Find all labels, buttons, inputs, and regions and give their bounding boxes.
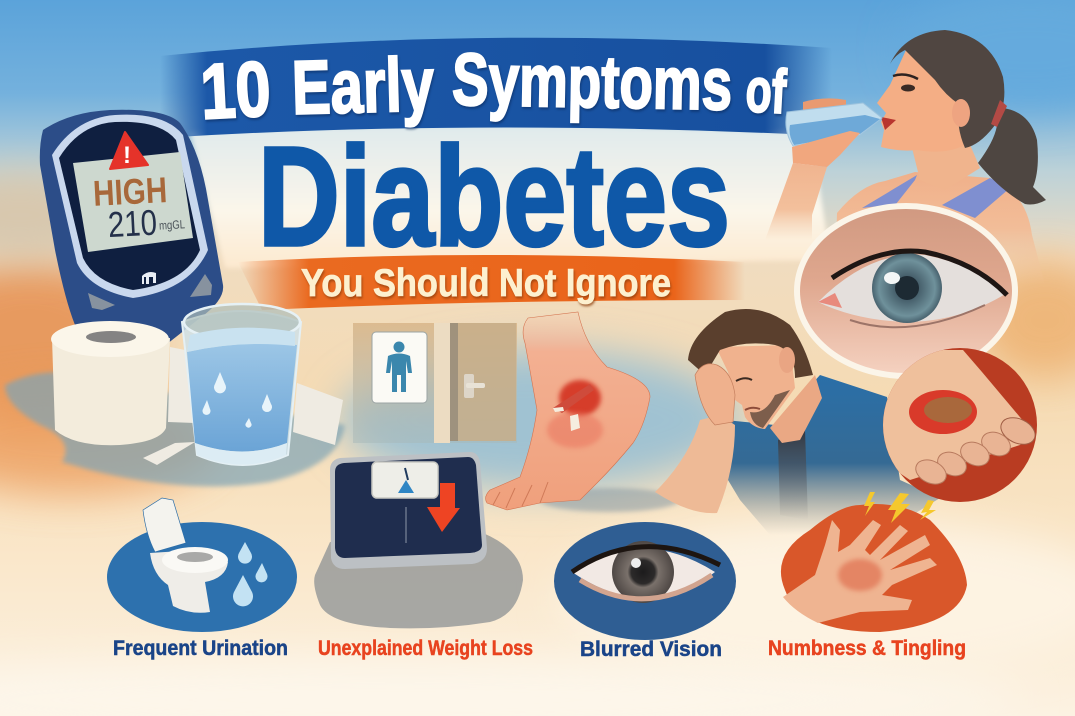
fingers bbox=[803, 98, 846, 110]
icon: numbness and tingling bbox=[781, 492, 967, 632]
hand on forehead bbox=[695, 364, 735, 425]
toilet paper roll bbox=[51, 321, 343, 465]
cream panel behind title bbox=[190, 125, 830, 268]
meter screen bbox=[73, 132, 193, 252]
icon: restroom person bbox=[372, 332, 427, 403]
scale dial bbox=[372, 462, 438, 498]
paper strip bbox=[143, 347, 343, 465]
label: numbness and tingling: Numbness & Tingling bbox=[768, 637, 966, 660]
face bbox=[716, 345, 795, 429]
hair bbox=[890, 30, 1004, 148]
face bbox=[877, 50, 985, 152]
title line 1: Early bbox=[291, 42, 435, 131]
meter screen: HIGH bbox=[92, 169, 168, 214]
water bottle bbox=[786, 103, 882, 146]
ponytail bbox=[978, 108, 1046, 204]
spilled water puddle bbox=[5, 372, 345, 486]
glass of water bbox=[182, 304, 301, 465]
title line 1: of bbox=[744, 56, 788, 127]
man with headache bbox=[655, 309, 940, 535]
title banner: blue ribbon bbox=[160, 38, 832, 138]
hand bbox=[792, 131, 860, 167]
hair bbox=[688, 309, 813, 378]
foot shadow bbox=[540, 488, 680, 512]
subtitle banner bbox=[238, 255, 745, 310]
tee bbox=[778, 430, 808, 520]
label: blurred vision: Blurred Vision bbox=[580, 638, 722, 661]
restroom sign and door bbox=[353, 323, 517, 443]
title line 1: 10 bbox=[198, 44, 273, 136]
foot with wound bbox=[486, 312, 650, 510]
woman drinking water bbox=[765, 30, 1046, 285]
circle: eye close-up bbox=[790, 200, 1022, 380]
tank top straps bbox=[862, 175, 1010, 218]
subtitle text: You Should Not Ignore bbox=[301, 262, 671, 305]
shirt bbox=[722, 375, 940, 535]
label: unexplained weight loss: Unexplained Weight Loss bbox=[318, 637, 533, 660]
title line 1: Symptoms bbox=[451, 38, 733, 125]
icon: warning triangle: ! bbox=[123, 142, 131, 169]
neck bbox=[910, 140, 980, 190]
torso bbox=[835, 172, 1045, 285]
title line 1 bbox=[198, 38, 788, 136]
neck bbox=[770, 375, 822, 443]
icon: frequent urination bbox=[107, 498, 297, 632]
weight scale bbox=[330, 452, 487, 569]
meter screen: mgGL bbox=[159, 217, 186, 233]
arm bbox=[655, 415, 735, 513]
glucose meter bbox=[40, 110, 223, 344]
meter screen: 210 bbox=[107, 202, 158, 245]
arm bbox=[765, 163, 827, 240]
weight scale shadow bbox=[314, 533, 523, 628]
icon: blurred vision bbox=[554, 522, 736, 640]
label: frequent urination: Frequent Urination bbox=[113, 637, 288, 660]
arrow: weight down bbox=[427, 483, 460, 532]
circle: foot ulcer bbox=[880, 348, 1039, 502]
title: Diabetes: Diabetes bbox=[258, 117, 730, 275]
